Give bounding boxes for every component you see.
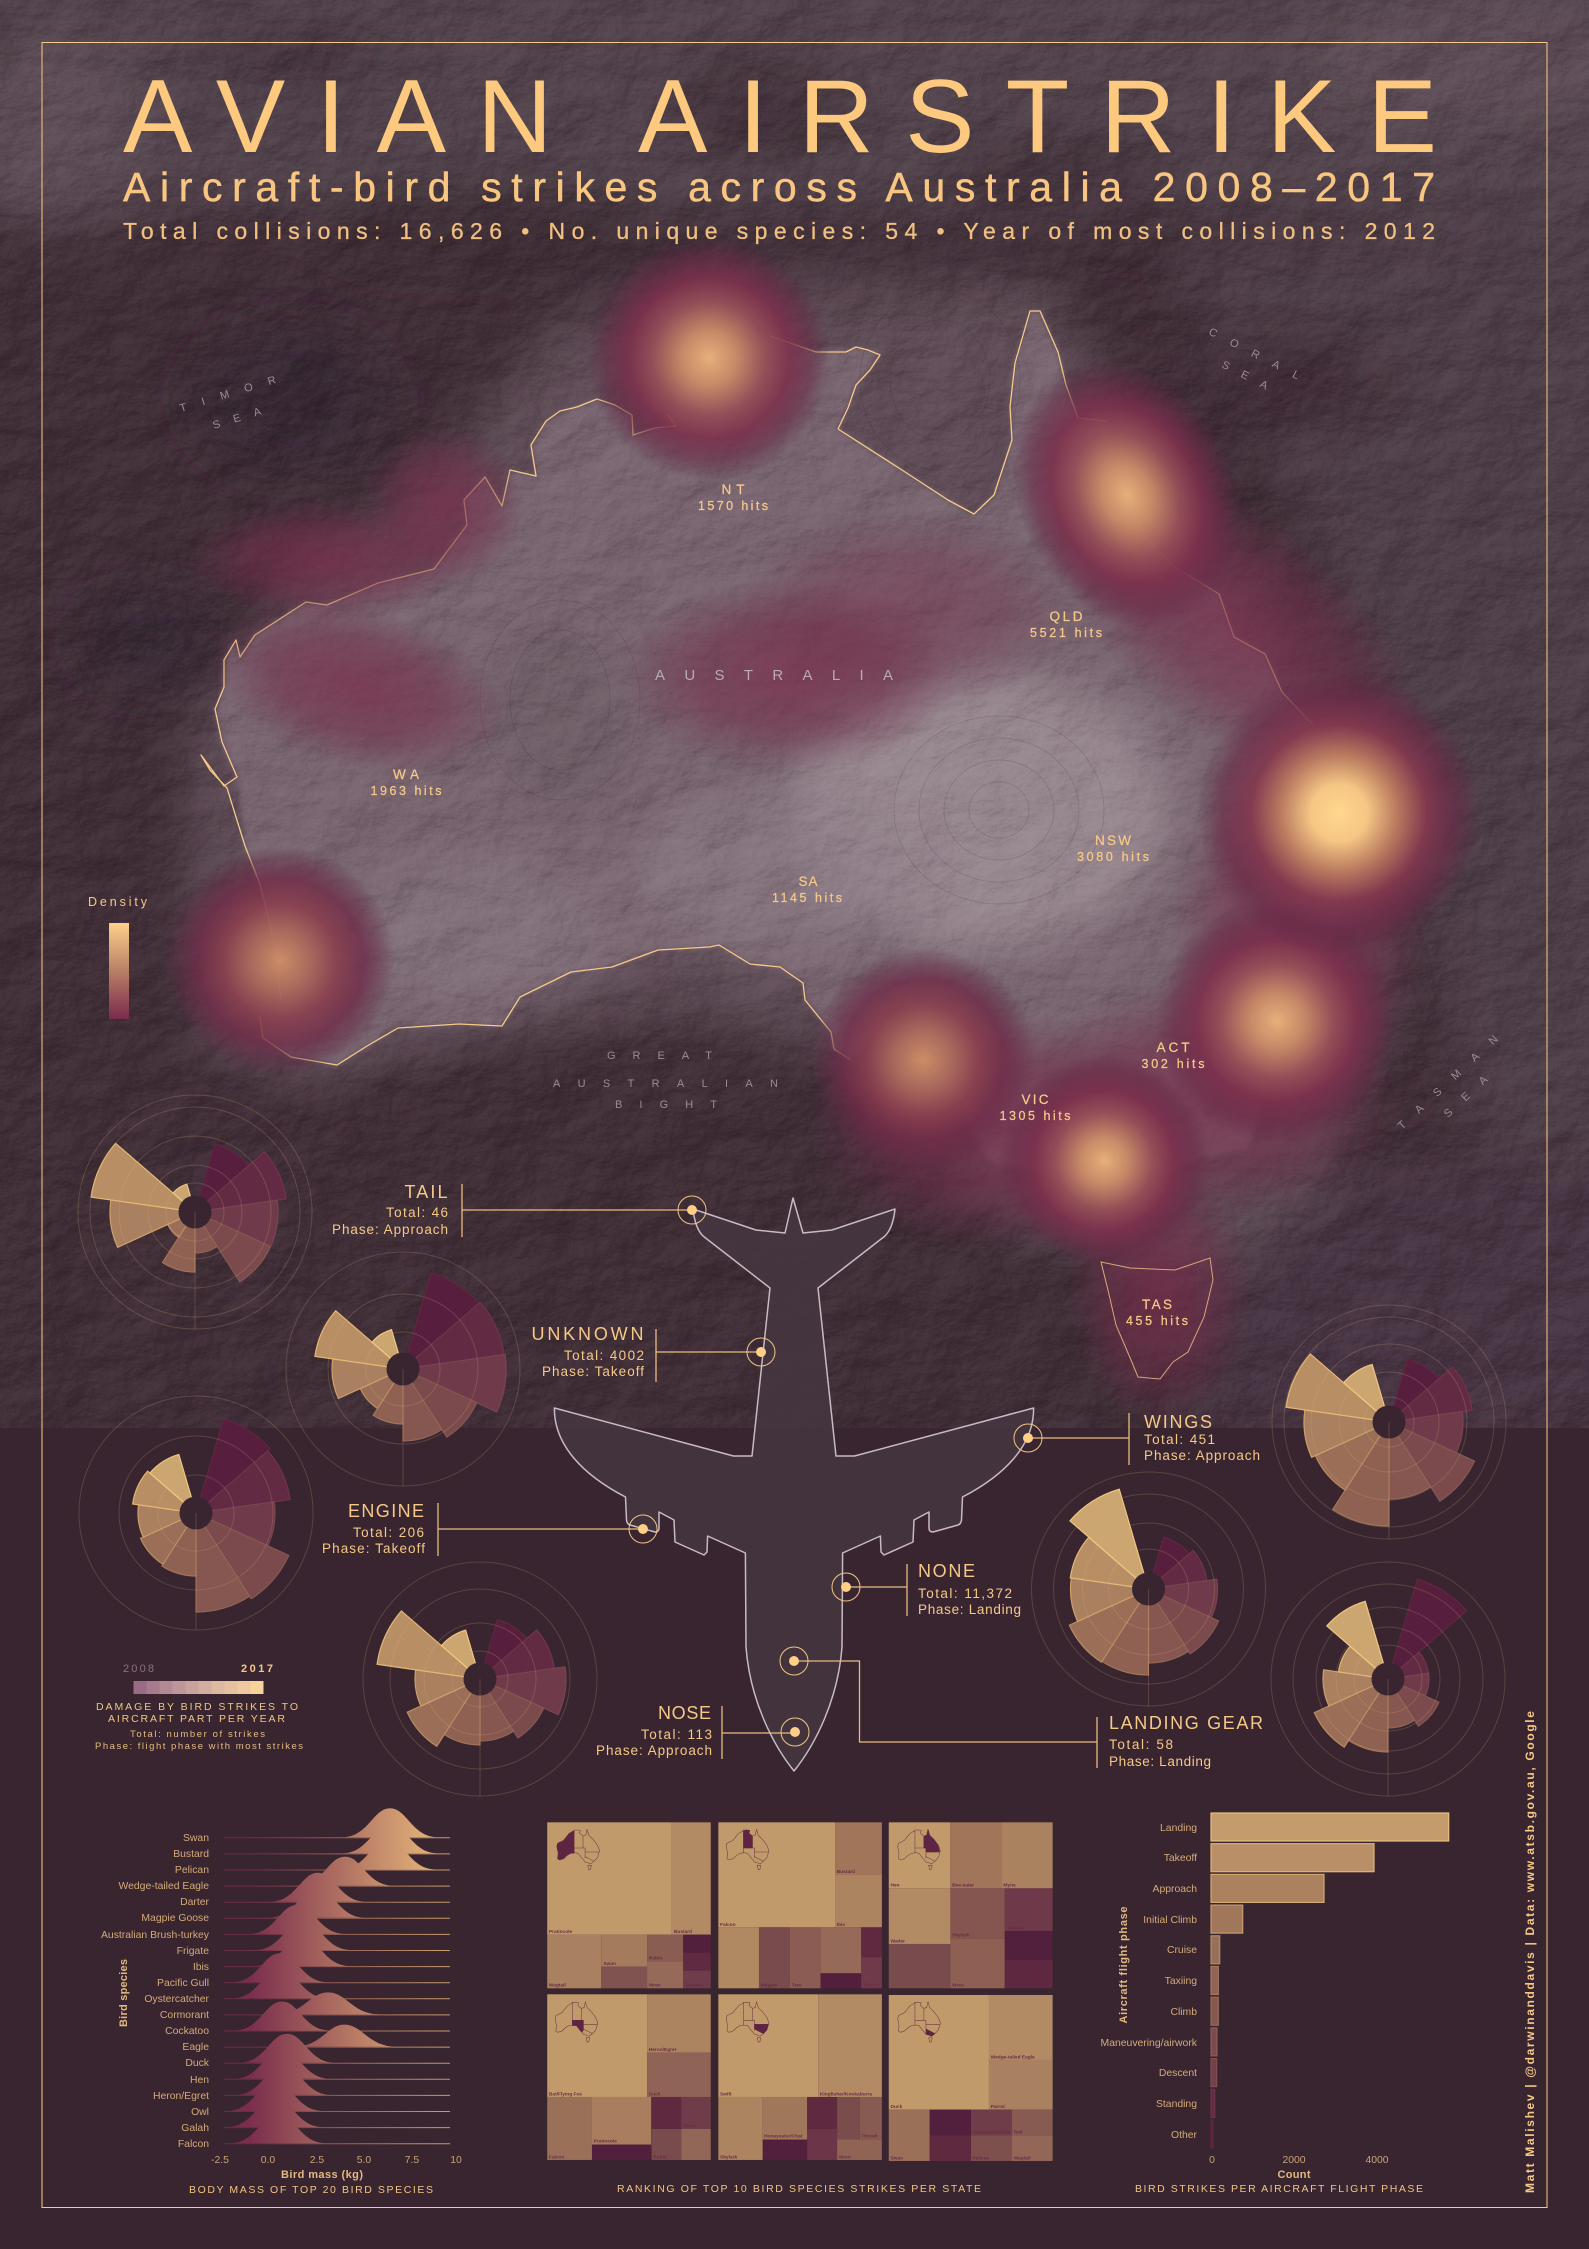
callout: none: Total: 11,372 bbox=[918, 1586, 1012, 1601]
callout: unknown bbox=[532, 1324, 775, 1382]
treemap: SA bbox=[547, 1994, 711, 2160]
state labels: ACT bbox=[1156, 1040, 1190, 1055]
treemap: VIC: Honeyeater/Chat bbox=[972, 2130, 1011, 2136]
callout: tail: Phase: Approach bbox=[332, 1222, 448, 1237]
subtitle: Aircraft-bird strikes across Australia 2008–2017 bbox=[123, 164, 1435, 210]
treemap: NSW: Skylark bbox=[720, 2154, 738, 2160]
rose chart legend bbox=[95, 1663, 303, 1752]
species labels: Eagle bbox=[182, 2042, 209, 2053]
callout: engine: Phase: Takeoff bbox=[322, 1541, 425, 1556]
treemap: VIC: Swan bbox=[890, 2155, 903, 2161]
treemap: SA: Pratincole bbox=[594, 2139, 617, 2145]
count axis: 0 bbox=[1209, 2155, 1215, 2166]
count axis: Aircraft flight phase bbox=[1118, 1906, 1130, 2024]
species labels: Owl bbox=[191, 2107, 209, 2118]
callout: wings: WINGS bbox=[1144, 1412, 1212, 1432]
ocean labels: BIGHT bbox=[615, 1099, 717, 1111]
rose chart legend: 2017 bbox=[241, 1663, 273, 1675]
ocean labels: GREAT bbox=[607, 1050, 712, 1062]
background: terrain map bbox=[0, 0, 1589, 1440]
rose chart: unknown bbox=[286, 1252, 520, 1486]
rose chart: tail bbox=[78, 1095, 312, 1329]
rose chart: wings bbox=[1272, 1305, 1506, 1539]
phase labels: Descent bbox=[1159, 2068, 1197, 2079]
state labels: QLD bbox=[1050, 609, 1083, 624]
rose chart legend: DAMAGE BY BIRD STRIKES TO bbox=[96, 1701, 298, 1713]
species labels: Hen bbox=[190, 2075, 209, 2086]
density heatmap bbox=[165, 236, 1481, 1425]
treemap: QLD: Hen bbox=[890, 1883, 900, 1889]
treemap: NT: Ibis bbox=[837, 1922, 845, 1928]
mass axis: -2.5 bbox=[211, 2155, 229, 2166]
caption: flight phase: BIRD STRIKES PER AIRCRAFT FLIGHT PHASE bbox=[1135, 2183, 1423, 2195]
callout: landing gear: Phase: Landing bbox=[1109, 1754, 1211, 1769]
species labels: Bustard bbox=[173, 1849, 209, 1860]
state labels: SA bbox=[798, 874, 818, 889]
callout: nose: Phase: Approach bbox=[596, 1743, 712, 1758]
phase labels: Other bbox=[1171, 2130, 1198, 2141]
callout: wings: Total: 451 bbox=[1144, 1432, 1215, 1447]
callout: unknown: UNKNOWN bbox=[532, 1324, 644, 1344]
callout: none: Phase: Landing bbox=[918, 1602, 1021, 1617]
treemap: QLD: Skylark bbox=[952, 1933, 970, 1939]
treemap: NT: Falcon bbox=[720, 1922, 736, 1928]
treemap: WA: Wagtail bbox=[549, 1983, 566, 1989]
treemap: QLD: Bee-eater bbox=[952, 1883, 974, 1889]
caption: body mass: BODY MASS OF TOP 20 BIRD SPECIES bbox=[189, 2184, 433, 2196]
phase labels: Climb bbox=[1170, 2007, 1197, 2018]
ridgeline densities bbox=[227, 1808, 438, 2143]
treemap: QLD: Thrush bbox=[1007, 1925, 1023, 1931]
bars bbox=[1211, 1813, 1449, 2148]
label: Australia: AUSTRALIA bbox=[655, 667, 893, 684]
density legend bbox=[88, 895, 148, 1019]
phase labels: Initial Climb bbox=[1143, 1915, 1197, 1926]
state labels: WA bbox=[393, 767, 419, 782]
mass axis: Bird species bbox=[118, 1959, 130, 2027]
state labels: 3080 hits bbox=[1077, 850, 1149, 864]
callout: nose: NOSE bbox=[658, 1703, 711, 1723]
species labels: Pacific Gull bbox=[157, 1978, 209, 1989]
treemap: WA: Bustard bbox=[674, 1929, 692, 1935]
treemap: VIC: Wagtail bbox=[1014, 2155, 1031, 2161]
treemap: SA: Heron/Egret bbox=[649, 2047, 677, 2053]
callout: engine: Total: 206 bbox=[353, 1525, 424, 1540]
coastline: Australia bbox=[201, 311, 1313, 1065]
treemap: SA: Robin bbox=[653, 2154, 667, 2160]
callout: landing gear bbox=[780, 1647, 1263, 1769]
phase labels: Standing bbox=[1156, 2099, 1197, 2110]
callout: tail: TAIL bbox=[404, 1182, 448, 1202]
ocean labels: SEA bbox=[1442, 1073, 1491, 1120]
title: AVIAN AIRSTRIKE bbox=[123, 59, 1437, 175]
callout: engine: ENGINE bbox=[348, 1501, 424, 1521]
land mass bbox=[215, 311, 1345, 1183]
treemap: NSW: Honeyeater/Chat bbox=[764, 2134, 803, 2140]
ocean labels bbox=[178, 326, 1501, 1132]
state labels bbox=[370, 482, 1204, 1328]
treemap: NT: Tern bbox=[792, 1983, 802, 1989]
rose chart legend: 2008 bbox=[123, 1663, 154, 1675]
species labels: Frigate bbox=[177, 1946, 209, 1957]
ocean labels: TIMOR bbox=[178, 374, 278, 415]
species labels: Cockatoo bbox=[165, 2026, 209, 2037]
callout: landing gear: LANDING GEAR bbox=[1109, 1713, 1263, 1733]
treemap: SA: Myna bbox=[683, 2123, 696, 2129]
count axis: 4000 bbox=[1365, 2155, 1389, 2166]
rose chart legend: Phase: flight phase with most strikes bbox=[95, 1741, 303, 1752]
aircraft silhouette bbox=[554, 1198, 1034, 1771]
treemap: WA: Robin bbox=[649, 1956, 663, 1962]
state labels: TAS bbox=[1142, 1297, 1172, 1312]
treemap: NT: Magpie bbox=[761, 1983, 778, 1989]
treemap: QLD: Wader bbox=[890, 1938, 905, 1944]
treemap: SA: Falcon bbox=[549, 2154, 565, 2160]
callout: wings bbox=[1014, 1412, 1260, 1465]
callout: unknown: Total: 4002 bbox=[564, 1348, 644, 1363]
species labels bbox=[101, 1833, 210, 2150]
callout: wings: Phase: Approach bbox=[1144, 1448, 1260, 1463]
species labels: Heron/Egret bbox=[153, 2091, 209, 2102]
phase labels bbox=[1101, 1823, 1198, 2141]
mass axis: 7.5 bbox=[405, 2155, 419, 2166]
summary statistics: Total collisions: 16,626 • No. unique species: 54 • Year of most collisions: 2012 bbox=[123, 218, 1435, 244]
treemap: NSW: Wren bbox=[839, 2154, 851, 2160]
mass axis: 5.0 bbox=[357, 2155, 371, 2166]
treemap: NSW: Kingfisher/Kookaburra bbox=[820, 2091, 872, 2097]
treemap: WA bbox=[547, 1822, 711, 1989]
species labels: Pelican bbox=[175, 1865, 209, 1876]
phase labels: Maneuvering/airwork bbox=[1101, 2038, 1198, 2049]
count axis: 2000 bbox=[1282, 2155, 1306, 2166]
treemap: VIC: Wedge-tailed Eagle bbox=[991, 2055, 1035, 2061]
callout: nose: Total: 113 bbox=[641, 1727, 712, 1742]
bottom panel background bbox=[0, 1428, 1589, 2249]
treemap: NSW: Thrush bbox=[861, 2133, 878, 2139]
species labels: Falcon bbox=[178, 2139, 209, 2150]
rose chart legend: Total: number of strikes bbox=[130, 1729, 265, 1740]
mass axis: Bird mass (kg) bbox=[281, 2169, 363, 2181]
credits: Matt Malishev | @darwinanddavis | Data: www.atsb.gov.au, Google bbox=[1523, 1711, 1537, 2193]
treemap: VIC: Duck bbox=[890, 2104, 903, 2110]
state labels: 455 hits bbox=[1126, 1314, 1188, 1328]
phase labels: Approach bbox=[1153, 1884, 1197, 1895]
callout: none: NONE bbox=[918, 1561, 975, 1581]
treemap: WA: Wren bbox=[649, 1983, 661, 1989]
treemap: QLD bbox=[889, 1822, 1053, 1989]
treemap: QLD: Wren bbox=[952, 1983, 964, 1989]
callout: none bbox=[832, 1561, 1021, 1617]
callout: unknown: Phase: Takeoff bbox=[542, 1364, 644, 1379]
phase labels: Cruise bbox=[1167, 1945, 1197, 1956]
mass axis bbox=[118, 1959, 462, 2181]
mass axis: 10 bbox=[450, 2155, 462, 2166]
state labels: 1963 hits bbox=[370, 784, 442, 798]
mass axis: 0.0 bbox=[261, 2155, 275, 2166]
state labels: NSW bbox=[1095, 833, 1131, 848]
species labels: Duck bbox=[185, 2058, 210, 2069]
state labels: 1570 hits bbox=[698, 499, 768, 513]
phase labels: Landing bbox=[1160, 1823, 1197, 1834]
rose chart: none bbox=[1032, 1472, 1266, 1706]
ocean labels: SEA bbox=[211, 406, 263, 432]
state labels: 1305 hits bbox=[1000, 1109, 1070, 1123]
callout: nose bbox=[596, 1703, 809, 1759]
state labels: 1145 hits bbox=[772, 891, 842, 905]
treemap: VIC bbox=[889, 1995, 1053, 2161]
species labels: Cormorant bbox=[160, 2010, 209, 2021]
caption: treemaps: RANKING OF TOP 10 BIRD SPECIES STRIKES PER STATE bbox=[617, 2183, 981, 2195]
contour lines bbox=[480, 290, 1104, 904]
count axis bbox=[1118, 1906, 1389, 2181]
treemap: WA: Thrush bbox=[685, 1983, 701, 1989]
coastline: Tasmania bbox=[1101, 1258, 1213, 1379]
callout: engine bbox=[322, 1501, 657, 1556]
treemap: NT: Bustard bbox=[837, 1869, 855, 1875]
rose chart: engine bbox=[79, 1396, 313, 1630]
treemap: WA: Swan bbox=[603, 1961, 616, 1967]
rose chart: nose bbox=[363, 1562, 597, 1796]
state labels: 302 hits bbox=[1142, 1057, 1204, 1071]
ocean labels: TASMAN bbox=[1396, 1033, 1501, 1132]
ridgeline chart: body mass bbox=[101, 1808, 462, 2196]
treemap: SA: Duck bbox=[649, 2091, 661, 2097]
bar chart: flight phase bbox=[1101, 1813, 1449, 2195]
treemap: NSW bbox=[718, 1994, 882, 2160]
treemap: QLD: Myna bbox=[1003, 1883, 1016, 1889]
species labels: Swan bbox=[183, 1833, 209, 1844]
density legend: Density bbox=[88, 895, 148, 909]
phase labels: Taxiing bbox=[1165, 1976, 1197, 1987]
species labels: Australian Brush-turkey bbox=[101, 1930, 210, 1941]
state labels: 5521 hits bbox=[1030, 626, 1102, 640]
callout: tail bbox=[332, 1182, 706, 1237]
treemap: VIC: Rail bbox=[1014, 2130, 1023, 2136]
count axis: Count bbox=[1278, 2169, 1311, 2181]
treemaps: species per state bbox=[547, 1822, 1053, 2161]
phase labels: Takeoff bbox=[1164, 1853, 1197, 1864]
treemap: VIC: Pelican bbox=[972, 2155, 989, 2161]
ocean labels: SEA bbox=[1220, 359, 1270, 393]
species labels: Galah bbox=[181, 2123, 209, 2134]
hillshade texture bbox=[0, 0, 1589, 1430]
rose chart legend: AIRCRAFT PART PER YEAR bbox=[108, 1713, 285, 1725]
treemap: NSW: Swift bbox=[720, 2091, 732, 2097]
ocean labels: AUSTRALIAN bbox=[553, 1078, 778, 1090]
treemap: NT: Thrush bbox=[863, 1983, 879, 1989]
state labels: VIC bbox=[1022, 1092, 1049, 1107]
ocean labels: CORAL bbox=[1207, 326, 1301, 382]
rose chart: landing gear bbox=[1271, 1562, 1505, 1796]
treemap: NT bbox=[718, 1822, 882, 1989]
treemap: VIC: Parrot bbox=[991, 2104, 1005, 2110]
species labels: Ibis bbox=[193, 1962, 209, 1973]
mass axis: 2.5 bbox=[310, 2155, 324, 2166]
species labels: Darter bbox=[180, 1897, 210, 1908]
ridgeline baselines bbox=[224, 1838, 450, 2144]
callout: tail: Total: 46 bbox=[386, 1205, 448, 1220]
state labels: NT bbox=[722, 482, 744, 497]
callout: landing gear: Total: 58 bbox=[1109, 1737, 1173, 1752]
species labels: Oystercatcher bbox=[144, 1994, 210, 2005]
species labels: Wedge-tailed Eagle bbox=[118, 1881, 209, 1892]
treemap: WA: Pratincole bbox=[549, 1929, 573, 1935]
species labels: Magpie Goose bbox=[141, 1913, 209, 1924]
treemap: SA: Bat/Flying Fox bbox=[549, 2091, 582, 2097]
